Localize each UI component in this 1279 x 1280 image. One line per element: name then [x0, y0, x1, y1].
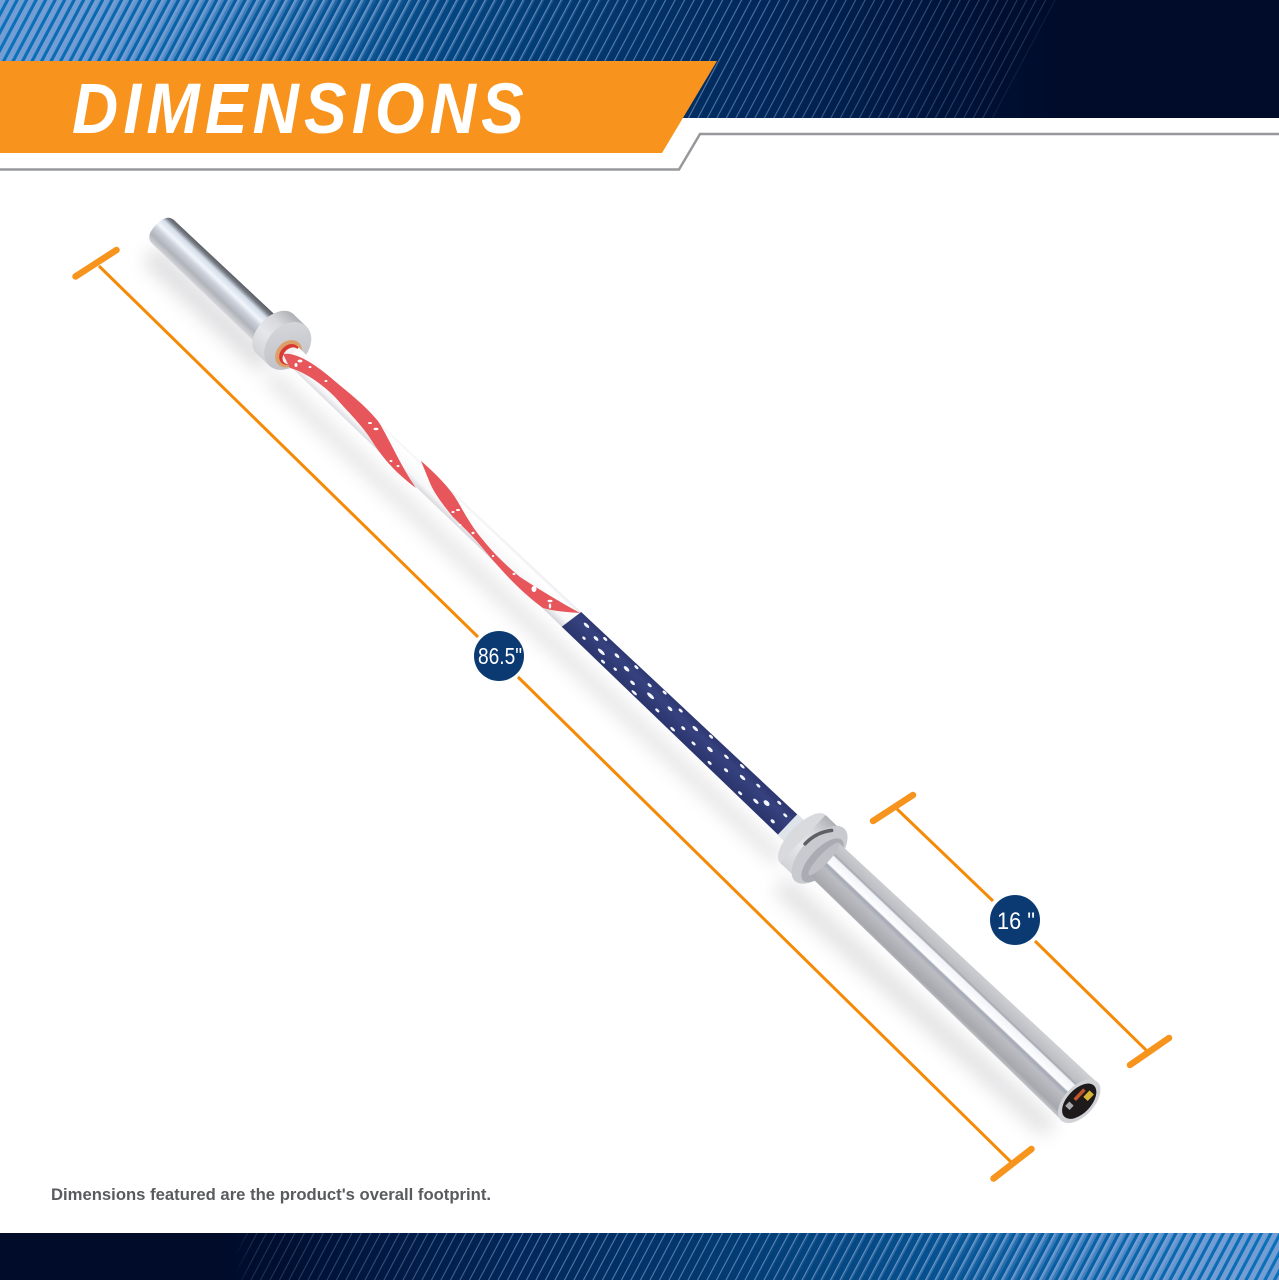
barbell	[131, 199, 1115, 1138]
bottom footer band	[0, 1233, 1279, 1280]
shaft: blue grip	[560, 608, 797, 835]
bar end cap	[1050, 1072, 1108, 1131]
title: DIMENSIONS	[72, 70, 524, 149]
badge: 86.5 inches	[474, 631, 524, 681]
top header band	[0, 0, 1279, 118]
far collar	[244, 302, 321, 379]
barbell shadow	[150, 254, 1050, 1130]
badge: 16 inches	[990, 895, 1040, 945]
red stripe speckles	[294, 360, 552, 608]
shaft: white section	[284, 346, 581, 629]
dimension line: overall length	[76, 250, 1032, 1178]
badge: 86.5 inches: 86.5"	[478, 643, 522, 669]
red spiral stripes	[283, 354, 580, 613]
badge: 16 inches: 16 "	[997, 908, 1035, 935]
near collar	[763, 798, 857, 893]
dimension line: sleeve length	[873, 795, 1169, 1065]
header rule	[0, 134, 1279, 170]
title banner	[0, 61, 717, 153]
far sleeve	[144, 213, 289, 353]
near sleeve	[802, 837, 1097, 1120]
footnote: Dimensions featured are the product's overall footprint.	[51, 1185, 491, 1204]
